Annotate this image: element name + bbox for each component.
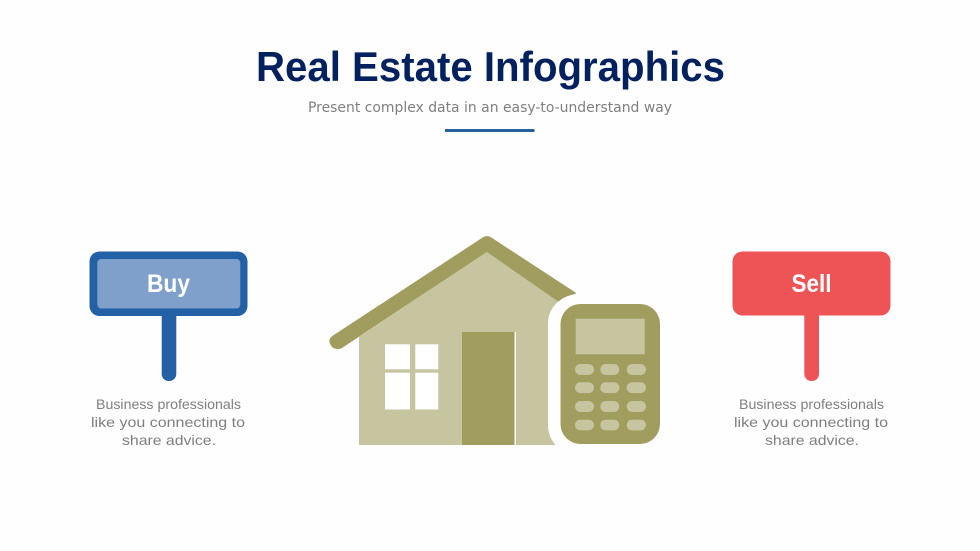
icon: house with calculator — [329, 236, 660, 446]
house body — [359, 252, 580, 445]
sign: sell — [732, 252, 890, 381]
subtitle: Present complex data in an easy-to-understand way — [308, 100, 672, 116]
roof — [329, 236, 577, 349]
door — [462, 332, 514, 445]
text: sell description: Business professionals — [739, 396, 884, 412]
text: sell description — [734, 396, 888, 448]
calculator screen — [576, 319, 645, 354]
title underline — [445, 129, 534, 132]
calculator keys — [575, 364, 646, 430]
calculator cutout — [548, 290, 600, 446]
sign: buy — [90, 252, 248, 381]
text: buy description: like you connecting to — [91, 414, 245, 430]
title: Real Estate Infographics — [256, 43, 725, 90]
text: buy description — [91, 396, 245, 448]
calculator — [560, 304, 660, 444]
window — [385, 344, 438, 410]
sign: buy: Buy — [147, 270, 190, 298]
text: sell description: like you connecting to — [734, 414, 888, 430]
text: sell description: share advice. — [765, 432, 859, 448]
text: buy description: Business professionals — [96, 396, 241, 412]
text: buy description: share advice. — [122, 432, 216, 448]
sign: sell: Sell — [792, 270, 832, 298]
